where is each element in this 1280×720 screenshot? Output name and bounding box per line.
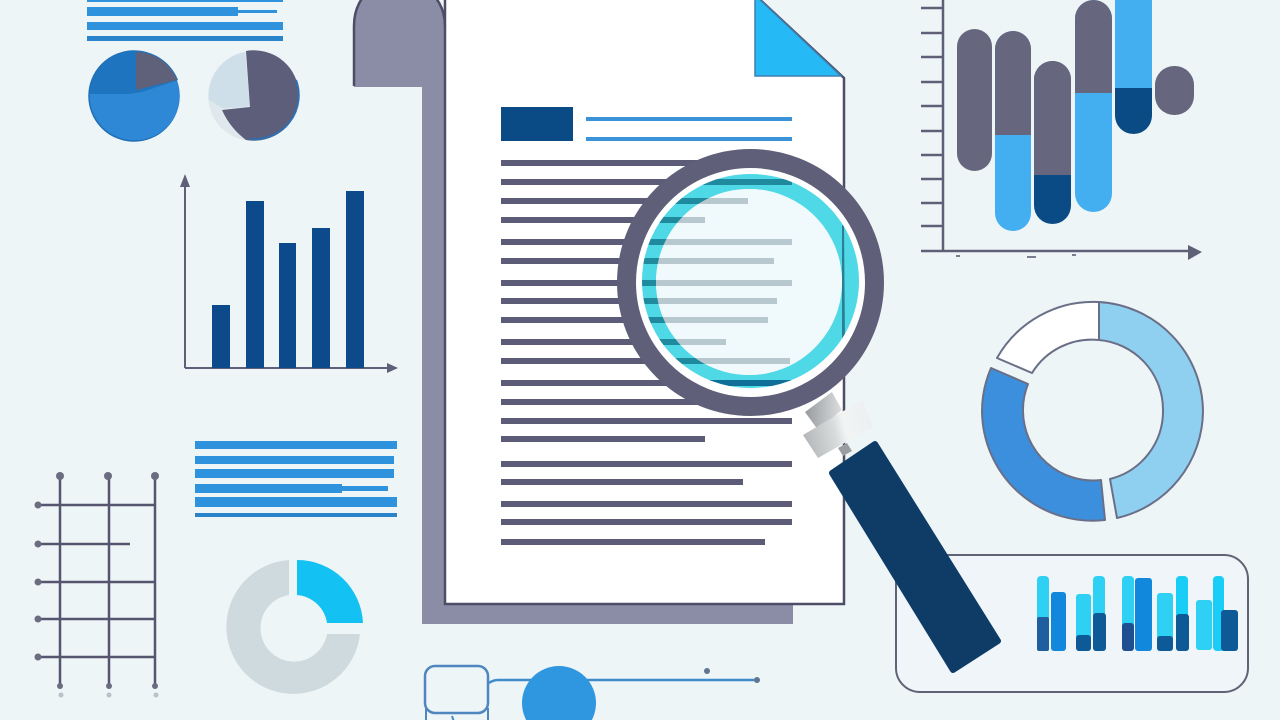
lens glass <box>634 166 866 398</box>
left bar chart <box>180 174 398 373</box>
pill 4 <box>1075 0 1112 212</box>
grid diagram <box>34 472 159 698</box>
document page <box>445 0 844 604</box>
magnified lines inside lens <box>656 198 792 364</box>
pie chart: blue <box>89 51 180 141</box>
document text lines <box>501 160 792 545</box>
segmented donut chart <box>982 302 1203 521</box>
pill 2 <box>995 31 1031 231</box>
document shadow and tab <box>354 0 793 624</box>
pill 3 <box>1034 61 1071 224</box>
document <box>354 0 844 624</box>
pie chart: grey with light wedge <box>208 50 299 141</box>
grouped bar chart <box>1037 576 1238 651</box>
lower-left blue text bars <box>195 441 397 517</box>
bottom flow diagram <box>425 666 760 720</box>
magnified lines through ring <box>620 179 845 386</box>
magnifier collar <box>803 392 873 458</box>
pill 6 <box>1155 66 1194 115</box>
donut chart: grey and cyan <box>226 560 363 694</box>
chart bars <box>212 191 364 368</box>
lens frame <box>626 158 874 406</box>
pill 1 <box>957 29 992 171</box>
document heading block <box>501 107 792 141</box>
pill chart axes <box>921 0 1202 260</box>
folded corner <box>755 0 841 76</box>
chart axes <box>180 174 398 373</box>
right pill chart <box>921 0 1202 260</box>
bottom-right panel <box>896 555 1248 692</box>
magnifying glass <box>620 158 998 670</box>
magnifier handle <box>832 444 998 670</box>
teal lens ring <box>642 174 859 388</box>
lens inner fill <box>656 189 842 375</box>
top-left blue text bars <box>87 0 283 41</box>
pill 5 <box>1115 0 1152 134</box>
